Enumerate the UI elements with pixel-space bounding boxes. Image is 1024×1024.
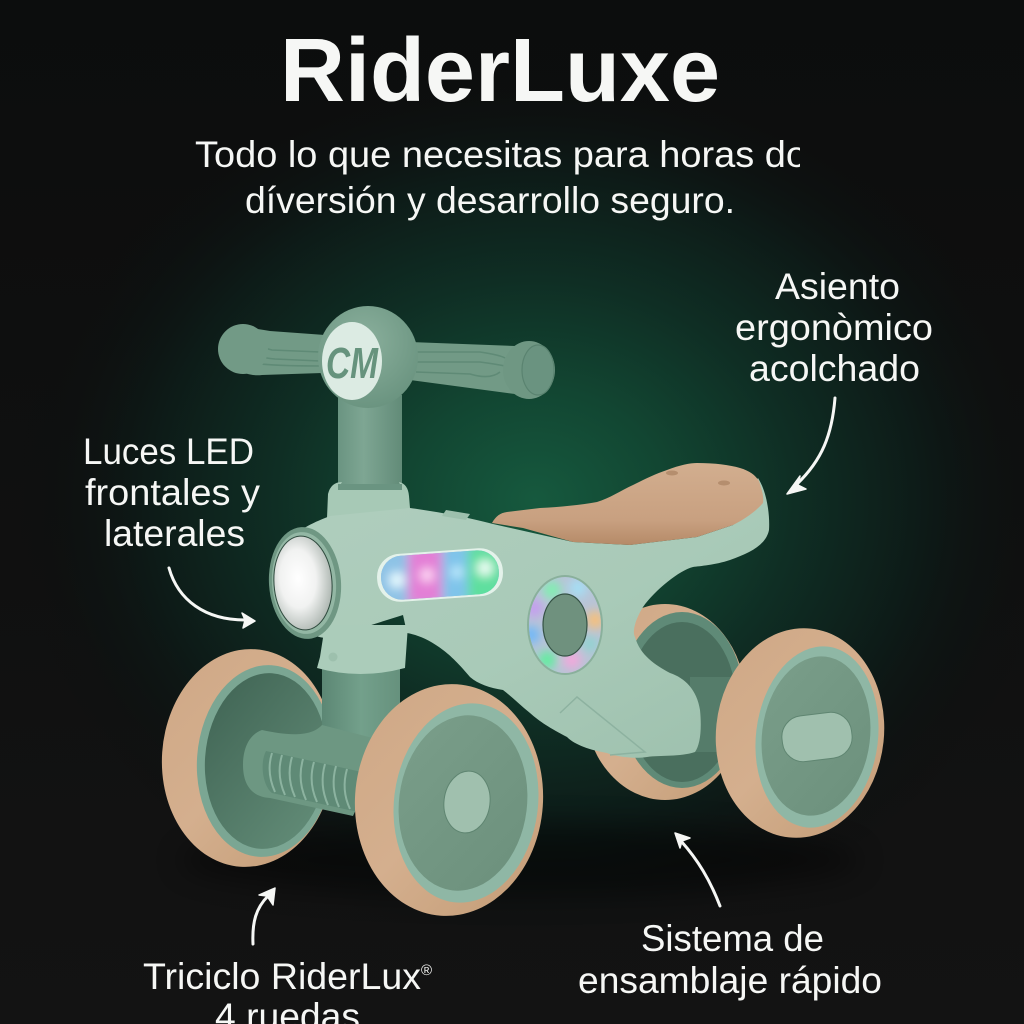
steering column: [338, 395, 402, 490]
front LED lamp: [265, 525, 345, 641]
subtitle: Todo lo que necesitas para horas do: [195, 134, 807, 175]
callout: assembly: ensamblaje rápido: [578, 960, 882, 1001]
handlebar: [218, 306, 555, 408]
callout: LED lights: Luces LED: [83, 431, 254, 472]
subtitle: [195, 134, 807, 221]
callout: tricycle: Triciclo RiderLux: [143, 956, 422, 997]
left grip cap: [218, 324, 268, 374]
floor shadow: [180, 824, 860, 896]
subtitle: díversión y desarrollo seguro.: [245, 180, 735, 221]
centre ball: [318, 306, 418, 408]
handlebar logo: CM: [326, 339, 379, 388]
callout: tricycle: ®: [421, 962, 432, 979]
callout: LED lights: laterales: [104, 513, 245, 554]
callout: seat: ergonòmico: [735, 307, 933, 348]
callout: seat: Asiento: [775, 266, 900, 307]
main body: [270, 478, 769, 758]
side LED bar: [377, 548, 503, 602]
arrow: assembly: [675, 833, 720, 906]
seat: [492, 463, 763, 545]
seat tab: [442, 510, 470, 520]
callout: LED lights: [83, 431, 261, 628]
right grip cap: [503, 341, 555, 399]
rear far wheel: [584, 604, 746, 800]
title: RiderLuxe: [280, 21, 720, 121]
callout: assembly: Sistema de: [641, 918, 824, 959]
product: balance bike: [155, 306, 895, 922]
collar: [327, 482, 411, 530]
callout: seat: [735, 266, 933, 494]
rear near wheel: [705, 620, 895, 846]
body panel detail: [560, 697, 645, 755]
arrow: tricycle: [253, 888, 275, 944]
callout: tricycle: [143, 888, 432, 1024]
front near wheel: [347, 678, 551, 922]
front far wheel: [155, 643, 341, 873]
callout: seat: acolchado: [749, 348, 920, 389]
arrow: LED lights: [169, 568, 255, 628]
handlebar logo: [322, 322, 382, 400]
callout: assembly: [578, 833, 882, 1001]
neck under lamp: [317, 625, 408, 674]
front axle and fork: [243, 665, 400, 816]
callout: LED lights: frontales y: [85, 472, 261, 513]
LED ring: [527, 575, 603, 675]
axle grip: [263, 751, 362, 812]
arrow: seat: [787, 398, 835, 494]
